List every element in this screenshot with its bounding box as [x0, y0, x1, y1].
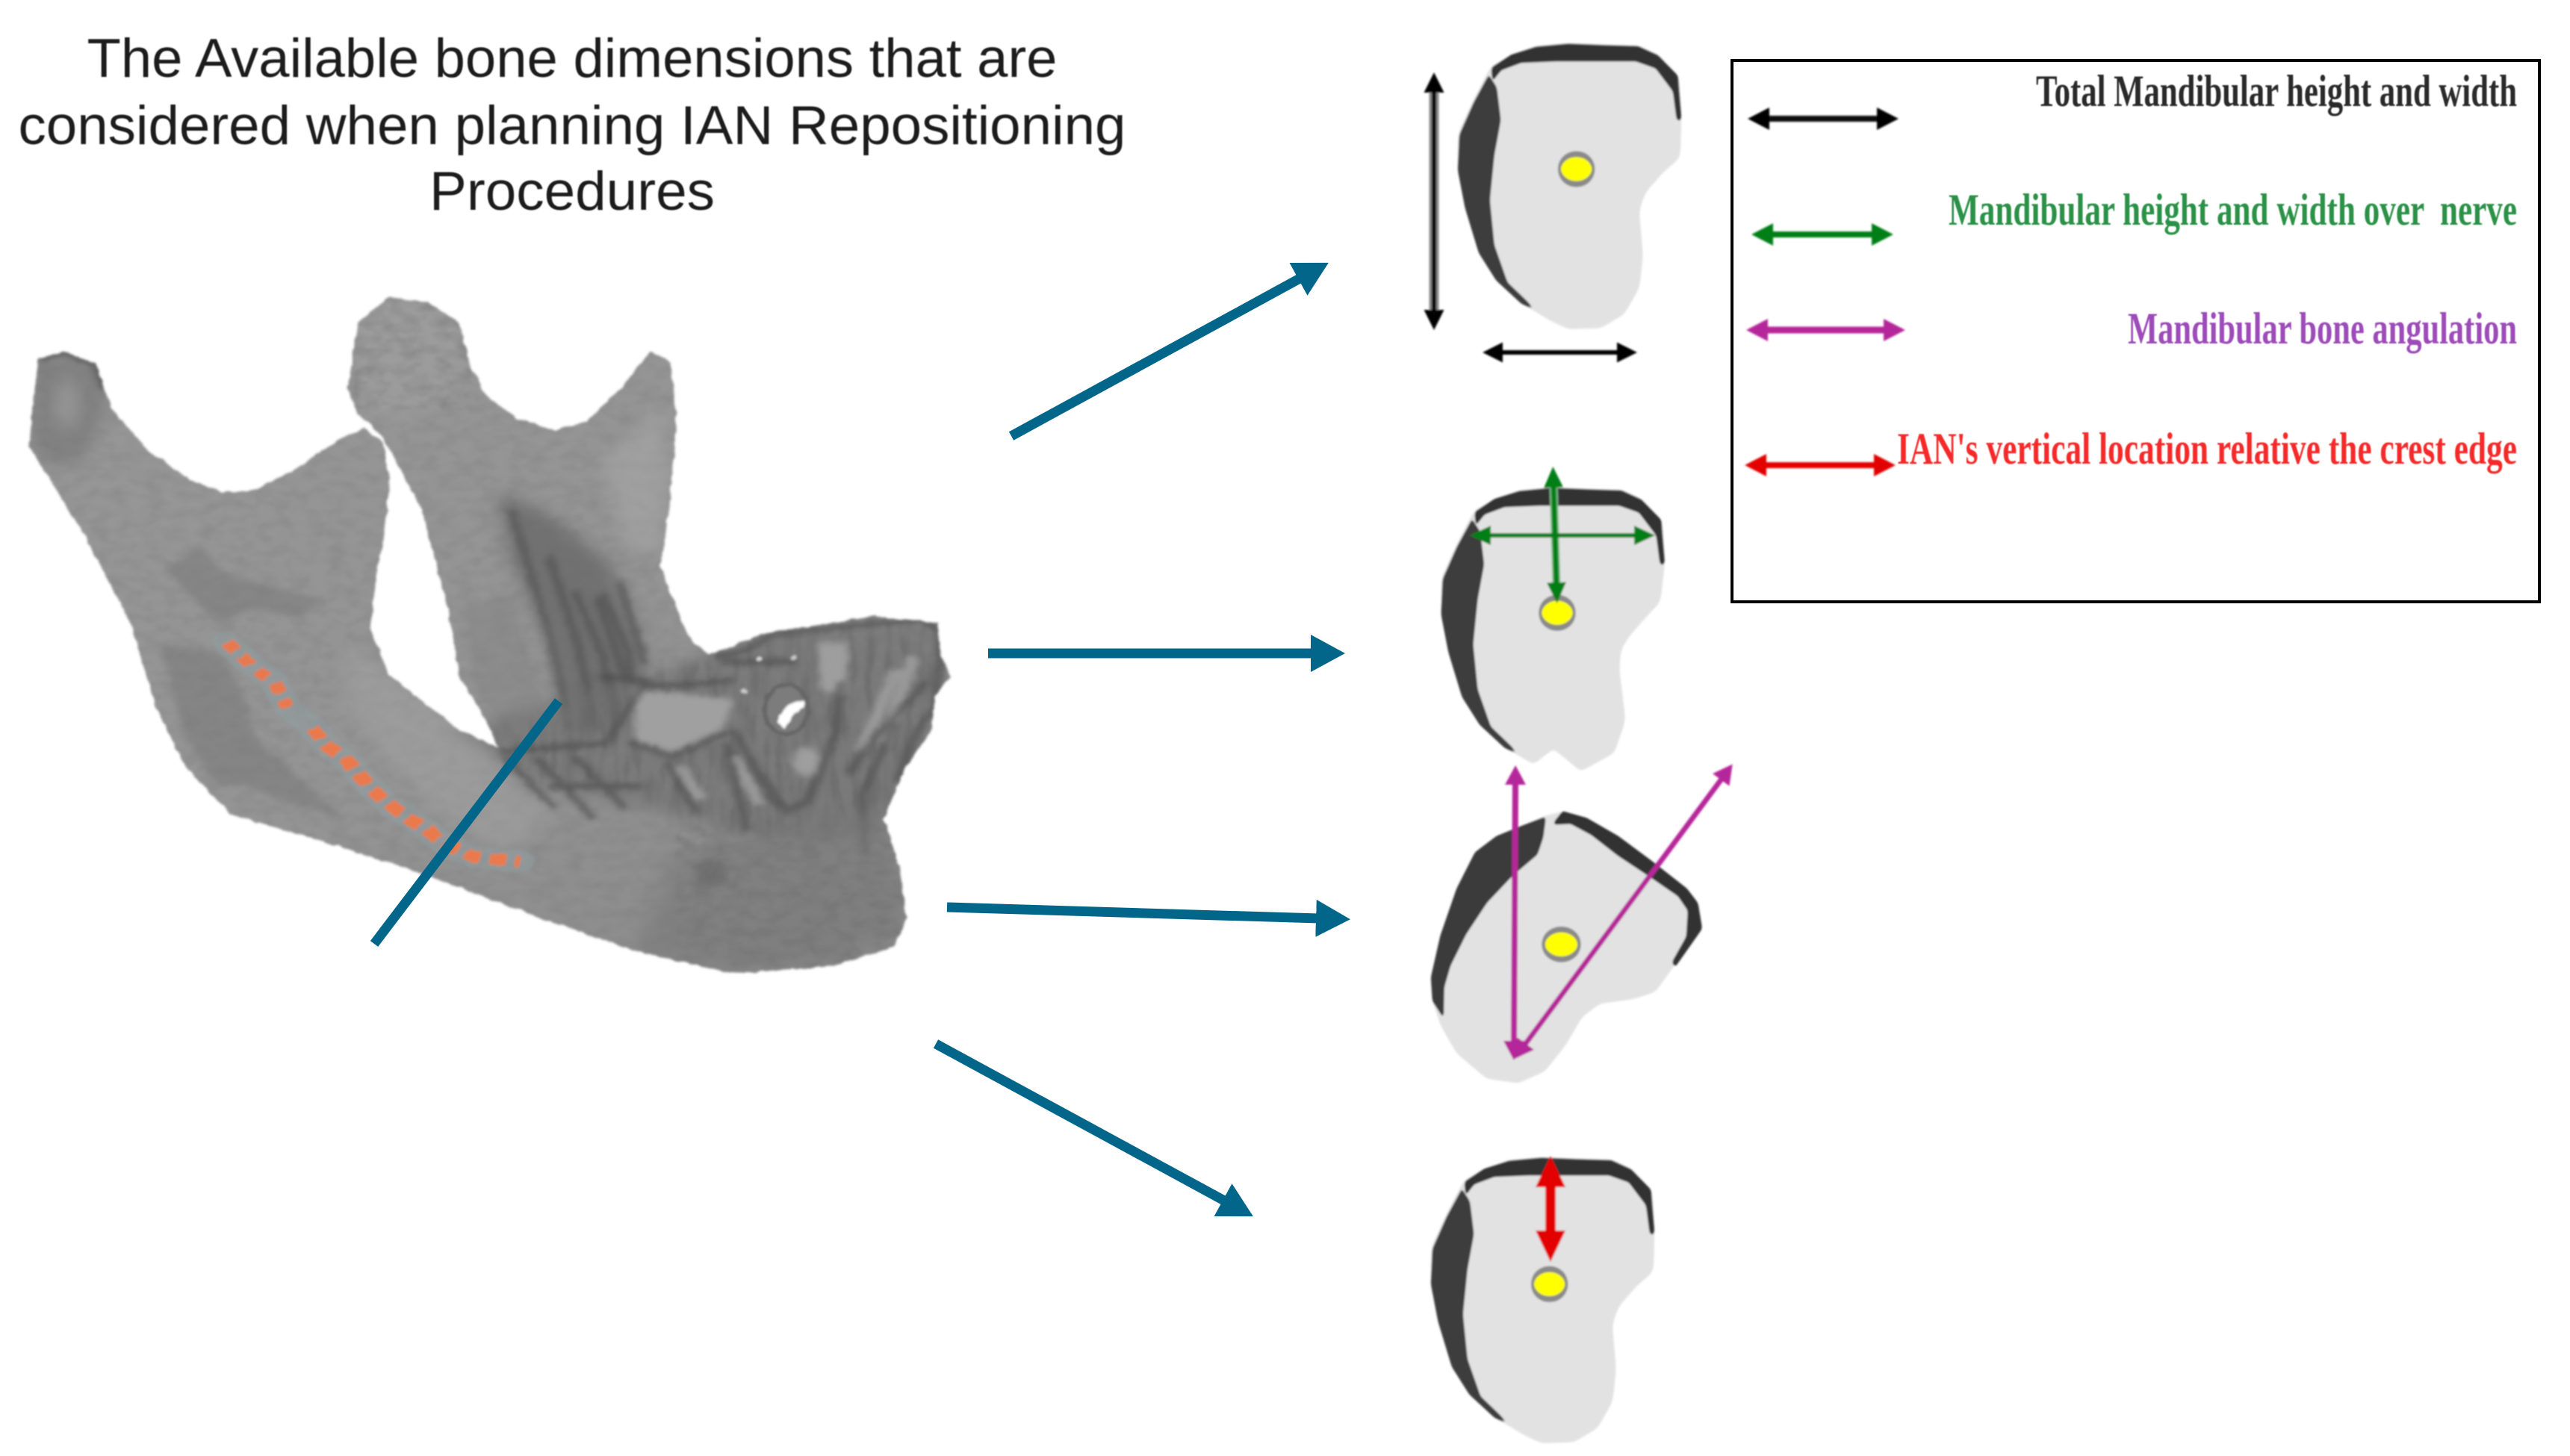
title: Procedures — [429, 161, 715, 222]
mandible 3D model — [27, 296, 952, 975]
green height arrow — [1554, 485, 1556, 585]
section 4: IAN vertical location relative to crest — [1431, 1157, 1654, 1443]
inferior alveolar nerve path — [226, 642, 520, 862]
section 3: mandibular bone angulation — [1431, 778, 1722, 1083]
section 1: total mandibular height and width — [1434, 43, 1681, 352]
legend panel — [1732, 60, 2539, 602]
arrow to angulation section — [947, 907, 1319, 918]
black height arrow — [1430, 90, 1438, 312]
legend arrow: green — [1771, 231, 1874, 237]
title — [18, 28, 1126, 222]
mental foramen hole — [741, 656, 808, 734]
black width arrow — [1500, 350, 1619, 355]
section 2: height and width over nerve — [1441, 485, 1665, 771]
red distance arrow — [1545, 1185, 1556, 1233]
green width arrow — [1489, 533, 1636, 538]
title: The Available bone dimensions that are — [87, 28, 1058, 89]
arrow to height over nerve section — [988, 648, 1314, 659]
legend arrow: black — [1767, 116, 1879, 122]
magenta vertical angle arrow — [1514, 783, 1515, 1043]
cutting plane line across mandible — [374, 701, 559, 944]
magenta diagonal angle arrow — [1524, 778, 1722, 1045]
legend arrow: magenta — [1766, 327, 1886, 333]
arrow to nerve location section — [936, 1044, 1226, 1201]
title: considered when planning IAN Repositioning — [18, 96, 1126, 156]
legend arrow: red — [1764, 462, 1876, 468]
arrow to total height and width section — [1011, 278, 1301, 436]
